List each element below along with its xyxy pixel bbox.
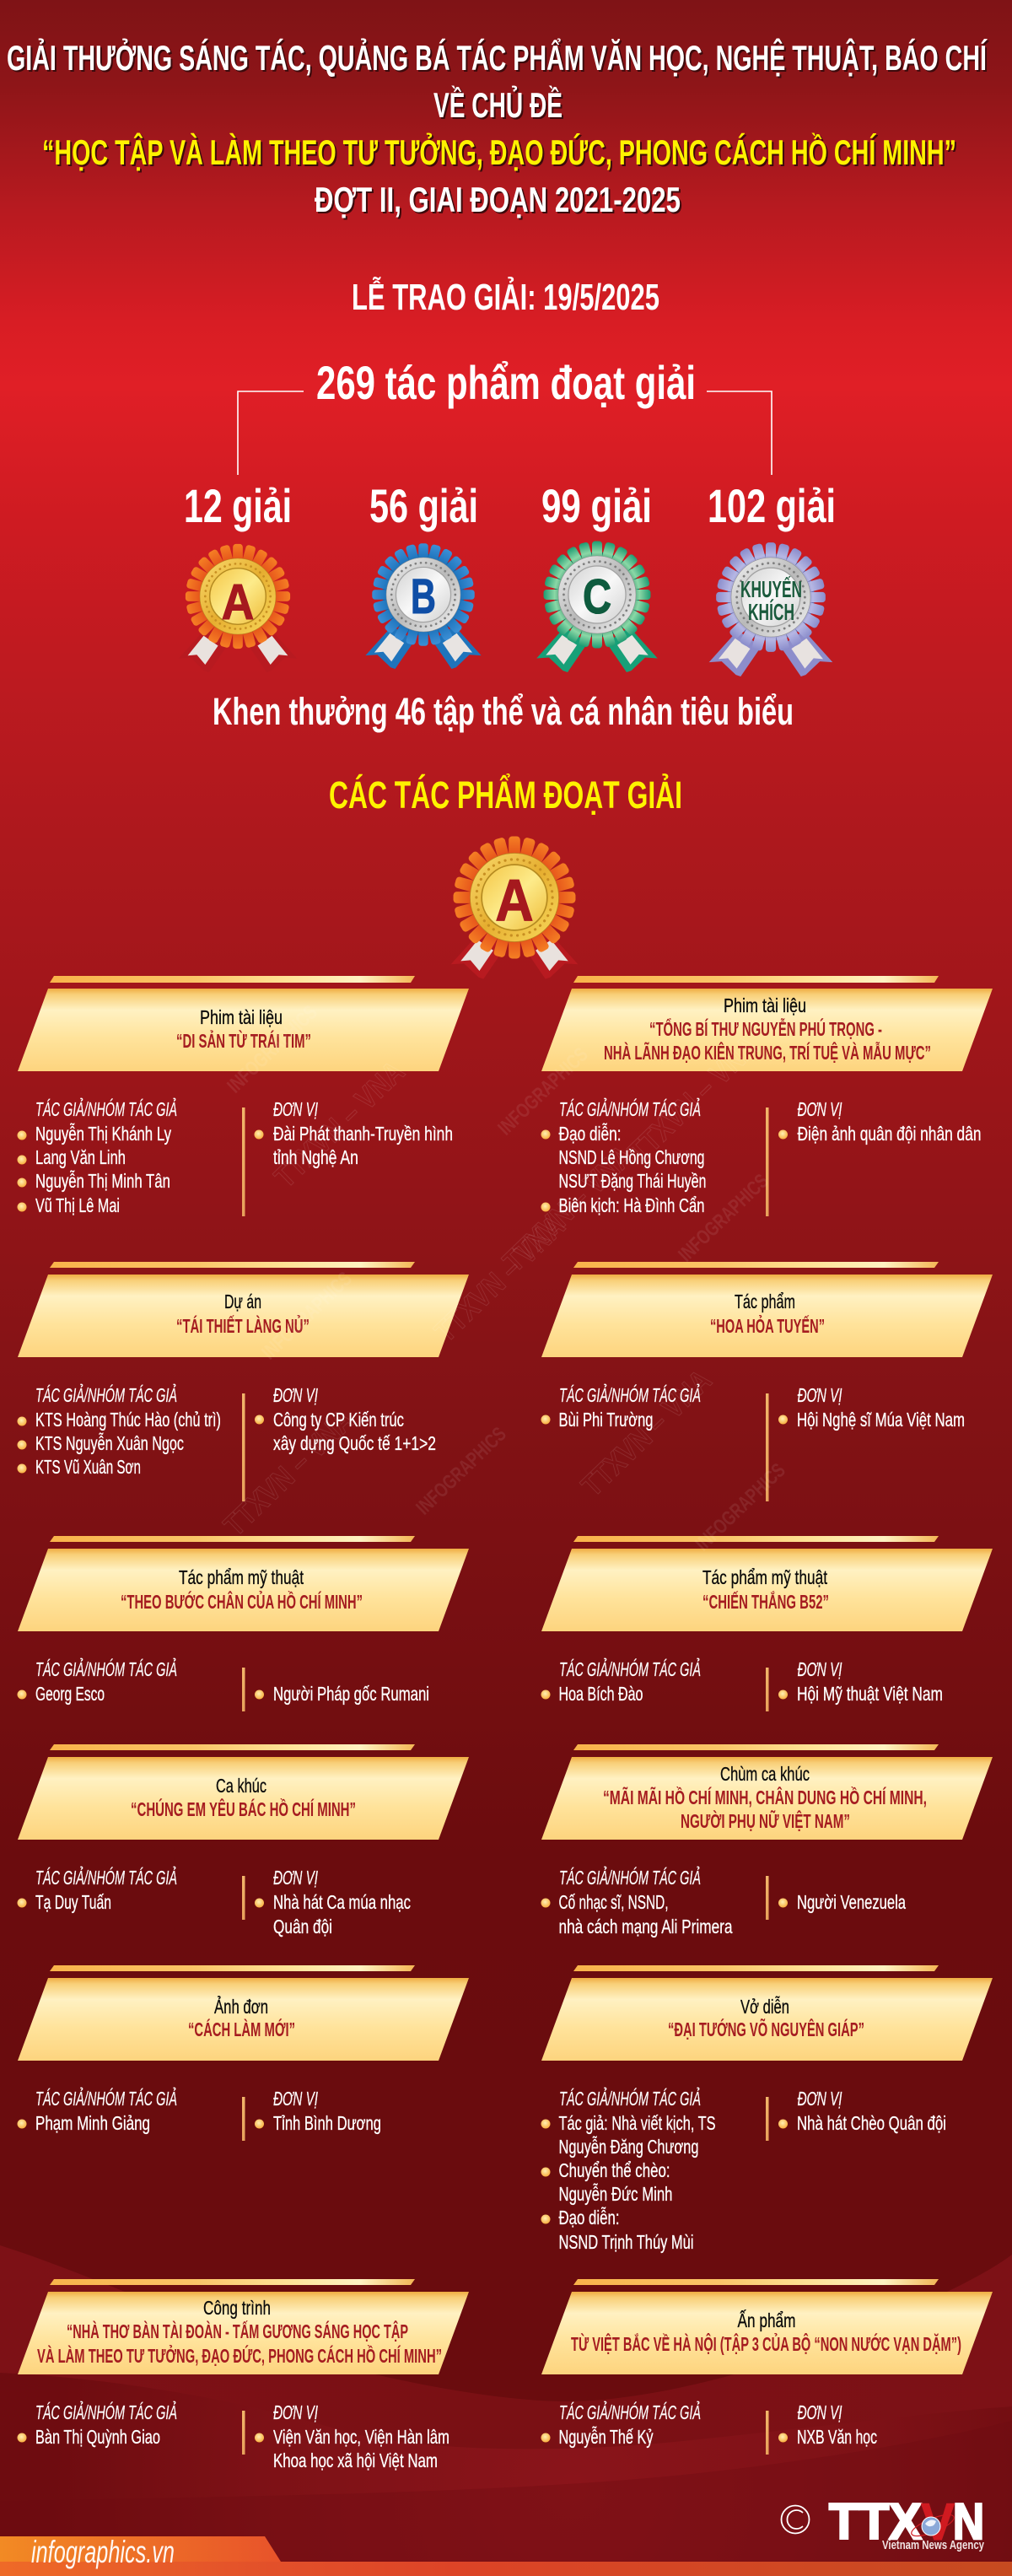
unit [778,2088,946,2134]
banner: Dự án [224,1291,261,1312]
icon: medal B: B [411,569,436,624]
authors [541,2400,701,2448]
title line 2: VỀ CHỦ ĐỀ [433,84,563,125]
unit: ĐƠN VỊ [273,1867,318,1889]
unit [778,1384,965,1431]
divider [242,1393,245,1501]
panel: Chiến thắng B52 [541,1536,993,1711]
icon: large medal A [451,837,578,979]
icon: large medal A: A [495,867,534,933]
watermarks: TTXVN – VNA [267,1054,411,1194]
unit: tỉnh Nghệ An [273,1146,358,1168]
authors: Nguyễn Thế Kỷ [558,2426,654,2448]
footer bar [0,2535,1012,2576]
banner: Tác phẩm [735,1291,795,1312]
banner [18,1744,469,1840]
authors: Georg Esco [35,1683,105,1705]
prize count: 99: 99 giải [541,479,652,532]
divider [766,1107,769,1216]
panel: Cách làm mới [17,1965,469,2141]
panel: Mãi mãi Hồ Chí Minh [541,1744,993,1937]
panel: Đại tướng Võ Nguyên Giáp [541,1965,993,2253]
unit: Đài Phát thanh-Truyền hình [273,1123,453,1145]
icon: medal Khuyến khích: KHÍCH [748,599,794,625]
unit: ĐƠN VỊ [273,1384,318,1406]
authors: KTS Vũ Xuân Sơn [35,1456,141,1478]
logo: TTXVN: N [953,2493,984,2550]
commendation line: Khen thưởng 46 tập thể và cá nhân tiêu biểu [213,690,794,733]
authors: Tác giả: Nhà viết kịch, TS [558,2112,715,2134]
authors: TÁC GIẢ/NHÓM TÁC GIẢ [559,2400,701,2423]
logo: TTXVN: Vietnam News Agency [882,2539,984,2552]
banner: “ĐẠI TƯỚNG VÕ NGUYÊN GIÁP” [668,2018,864,2040]
icon: medal C [536,542,658,672]
authors [541,1865,733,1937]
panel: Tổng Bí thư Nguyễn Phú Trọng [541,976,993,1216]
authors: Đạo diễn: [558,2207,619,2228]
authors: KTS Hoàng Thúc Hào (chủ trì) [35,1409,221,1431]
watermarks: TTXVN – VNA [574,1362,718,1503]
watermarks: TTXVN – VNA [428,1208,571,1349]
ceremony date: LỄ TRAO GIẢI: 19/5/2025 [352,276,659,318]
banner: “TỔNG BÍ THƯ NGUYỄN PHÚ TRỌNG - [649,1016,882,1040]
unit: xây dựng Quốc tế 1+1>2 [273,1432,436,1454]
banner: “CHÚNG EM YÊU BÁC HỒ CHÍ MINH” [131,1797,356,1820]
unit [255,1098,453,1168]
unit [778,1658,943,1705]
authors: Cố nhạc sĩ, NSND, [558,1891,668,1913]
logo: TTXVN [829,2493,984,2552]
authors: Bàn Thị Quỳnh Giao [35,2426,160,2448]
unit: Nhà hát Chèo Quân đội [797,2112,946,2134]
banner: Ca khúc [216,1775,266,1797]
authors: NSƯT Đặng Thái Huyền [558,1170,707,1192]
divider [242,1107,245,1216]
divider [242,2411,245,2455]
banner: Phim tài liệu [200,1006,283,1028]
authors [17,1657,177,1705]
divider [242,1668,245,1711]
authors: KTS Nguyễn Xuân Ngọc [35,1432,184,1454]
website: infographics.vn [31,2535,175,2569]
banner: NGƯỜI PHỤ NỮ VIỆT NAM” [681,1809,850,1832]
total works heading: 269 tác phẩm đoạt giải [316,356,696,409]
banner [541,1536,993,1631]
banner: “NHÀ THƠ BÀN TÀI ĐOÀN - TẤM GƯƠNG SÁNG HỌC TẬP [67,2320,408,2342]
divider [242,1876,245,1920]
banner: “TÁI THIẾT LÀNG NỦ” [176,1313,310,1337]
unit [255,1867,411,1937]
watermarks: INFOGRAPHICS [493,1043,593,1140]
authors: Nguyễn Thị Khánh Ly [35,1123,171,1145]
unit [778,2401,877,2448]
unit [778,1891,906,1913]
panel: Theo bước chân của Hồ Chí Minh [17,1536,469,1711]
panel: Nhà thơ Bàn Tài Đoàn [17,2279,469,2471]
title line 4: ĐỢT II, GIAI ĐOẠN 2021-2025 [315,180,681,219]
banner [541,1744,993,1840]
authors: nhà cách mạng Ali Primera [558,1916,733,1937]
watermarks: TTXVN – VNA [622,1028,765,1169]
authors [17,1382,221,1478]
authors [541,1657,701,1705]
title block [7,37,988,219]
unit [255,1384,436,1454]
authors: TÁC GIẢ/NHÓM TÁC GIẢ [559,1097,701,1120]
authors [17,2086,177,2134]
divider [766,1668,769,1711]
unit: Công ty CP Kiến trúc [273,1409,404,1431]
banner: “CHIẾN THẮNG B52” [702,1590,829,1613]
section heading: CÁC TÁC PHẨM ĐOẠT GIẢI [329,773,682,816]
authors: TÁC GIẢ/NHÓM TÁC GIẢ [35,1382,177,1406]
banner: Tác phẩm mỹ thuật [179,1566,304,1588]
authors: TÁC GIẢ/NHÓM TÁC GIẢ [35,1097,177,1120]
banner [541,976,993,1071]
banner [18,976,469,1071]
unit [255,2088,381,2134]
authors [541,1097,707,1216]
authors: Tạ Duy Tuấn [35,1891,111,1913]
unit: ĐƠN VỊ [798,1384,842,1406]
unit: ĐƠN VỊ [273,2401,318,2423]
banner [18,1262,469,1357]
authors: Nguyễn Đức Minh [558,2183,673,2205]
unit: Khoa học xã hội Việt Nam [273,2449,438,2471]
authors: TÁC GIẢ/NHÓM TÁC GIẢ [35,2086,177,2110]
authors: NSND Trịnh Thúy Mùi [558,2231,693,2253]
banner: “HOA HỎA TUYẾN” [710,1313,825,1337]
banner [541,2279,993,2374]
unit: Người Venezuela [797,1891,906,1913]
watermarks: INFOGRAPHICS [691,1459,790,1555]
divider [766,2097,769,2141]
authors: NSND Lê Hồng Chương [558,1146,705,1168]
authors [17,1865,177,1913]
banner: Ấn phẩm [737,2309,796,2331]
authors: TÁC GIẢ/NHÓM TÁC GIẢ [35,2400,177,2423]
watermarks: INFOGRAPHICS [257,1268,357,1364]
watermarks: INFOGRAPHICS [674,1170,773,1266]
authors: TÁC GIẢ/NHÓM TÁC GIẢ [559,1382,701,1406]
banner [18,1536,469,1631]
authors: TÁC GIẢ/NHÓM TÁC GIẢ [35,1657,177,1680]
icon: medal Khuyến khích: KHUYẾN [740,576,802,602]
watermarks: TTXVN – VNA [217,1402,360,1543]
watermarks: TTXVN – VNA [496,1138,639,1279]
unit: ĐƠN VỊ [273,1098,318,1120]
banner: Vở diễn [740,1996,789,2018]
authors: Bùi Phi Trường [558,1409,653,1431]
watermarks: INFOGRAPHICS [412,1423,511,1519]
panel: Từ Việt Bắc về Hà Nội [541,2279,993,2455]
icon: medal Khuyến khích [709,542,832,676]
divider [766,2411,769,2455]
authors: Chuyển thể chèo: [558,2159,670,2181]
banner [541,1965,993,2061]
authors: Biên kịch: Hà Đình Cẩn [558,1194,705,1216]
unit [255,1683,429,1705]
authors: TÁC GIẢ/NHÓM TÁC GIẢ [35,1865,177,1889]
panel: Chúng em yêu Bác Hồ Chí Minh [17,1744,469,1937]
banner: Tác phẩm mỹ thuật [702,1566,827,1588]
authors: Vũ Thị Lê Mai [35,1194,120,1216]
authors [17,1097,177,1216]
banner: Phim tài liệu [724,994,806,1016]
unit: ĐƠN VỊ [798,1658,842,1680]
logo: TTXVN: TTX [829,2493,922,2550]
prize count: 12: 12 giải [184,479,292,532]
authors [541,2086,715,2253]
unit: ĐƠN VỊ [798,2088,842,2110]
authors: TÁC GIẢ/NHÓM TÁC GIẢ [559,2086,701,2110]
divider [766,1393,769,1501]
icon: medal B [365,543,482,669]
unit: Người Pháp gốc Rumani [273,1683,429,1705]
authors: TÁC GIẢ/NHÓM TÁC GIẢ [559,1657,701,1680]
banner [18,1965,469,2061]
unit: ĐƠN VỊ [798,1098,842,1120]
panel: Tái thiết Làng Nủ [17,1262,469,1501]
watermarks: INFOGRAPHICS [223,1001,322,1097]
banner [541,1262,993,1357]
icon: copyright [781,2505,810,2534]
banner: “CÁCH LÀM MỚI” [188,2018,295,2040]
banner: “THEO BƯỚC CHÂN CỦA HỒ CHÍ MINH” [121,1589,363,1613]
unit: Hội Mỹ thuật Việt Nam [797,1683,943,1705]
banner: Chùm ca khúc [720,1763,810,1785]
authors: Nguyễn Đăng Chương [558,2136,698,2158]
unit [778,1098,982,1145]
prize count: 102: 102 giải [708,479,836,532]
logo: TTXVN: V [921,2493,955,2552]
authors: Phạm Minh Giảng [35,2112,150,2134]
banner: VÀ LÀM THEO TƯ TƯỞNG, ĐẠO ĐỨC, PHONG CÁCH HỒ CHÍ MINH” [37,2343,442,2367]
divider [766,1876,769,1920]
panel: Di sản từ trái tim [17,976,469,1216]
banner: “DI SẢN TỪ TRÁI TIM” [176,1028,311,1052]
unit: Nhà hát Ca múa nhạc [273,1891,411,1913]
unit [255,2401,449,2471]
divider [242,2097,245,2141]
icon: medal C: C [583,570,611,624]
banner: Ảnh đơn [214,1994,268,2018]
authors: Nguyễn Thị Minh Tân [35,1170,170,1192]
authors: TÁC GIẢ/NHÓM TÁC GIẢ [559,1865,701,1889]
authors [541,1382,701,1431]
watermarks [217,1001,790,1555]
unit: Viện Văn học, Viện Hàn lâm [273,2426,449,2448]
prize count: 56: 56 giải [369,479,478,532]
unit: Quân đội [273,1916,332,1937]
icon: medal A [179,544,297,672]
panel: Hoa hỏa tuyến [541,1262,993,1501]
unit: ĐƠN VỊ [798,2401,842,2423]
bracket connector [238,391,772,475]
authors: Hoa Bích Đào [558,1683,643,1705]
unit: NXB Văn học [797,2426,877,2448]
icon: medal A: A [222,574,254,630]
authors: Lang Văn Linh [35,1146,126,1168]
banner: Công trình [203,2297,271,2319]
authors: Đạo diễn: [558,1123,621,1145]
unit: ĐƠN VỊ [273,2088,318,2110]
banner [18,2279,469,2374]
authors [17,2400,177,2448]
unit: Tỉnh Bình Dương [273,2112,381,2134]
